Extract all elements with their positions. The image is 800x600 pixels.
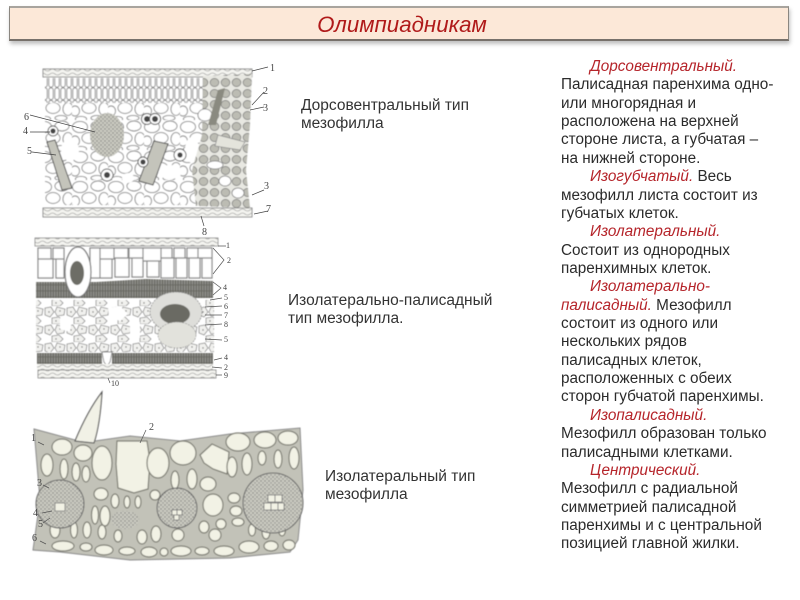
illustration: isolateral-palisade mesophyll cross-section	[35, 238, 218, 378]
text block: mesophyll types: Изолатеральный.	[590, 223, 720, 240]
text block: mesophyll types: или многорядная и	[561, 95, 696, 112]
spongy parenchyma	[36, 300, 214, 352]
top epidermis	[35, 238, 218, 246]
text block: mesophyll types	[561, 58, 773, 552]
callouts: isolateral-palisade labels: 6	[224, 302, 228, 311]
callouts: isolateral labels: 3	[37, 478, 42, 489]
title banner: Олимпиадникам	[317, 12, 487, 37]
caption: isolateral-palisade type	[288, 292, 492, 327]
text block: mesophyll types: состоит из одного или	[561, 315, 718, 332]
upper epidermis	[43, 69, 252, 77]
caption: dorsiventral type: мезофилла	[301, 115, 384, 132]
callouts: dorsiventral labels: 4	[23, 126, 28, 137]
text block: mesophyll types: Изопалисадный.	[590, 407, 707, 424]
epidermal and palisade cells	[41, 431, 299, 557]
callouts: isolateral labels: 4	[33, 508, 38, 519]
text block: mesophyll types: симметрией палисадной	[561, 499, 736, 516]
callouts: dorsiventral labels: 3	[263, 103, 268, 114]
callouts: isolateral-palisade labels: 1	[226, 241, 230, 250]
callouts: dorsiventral labels: 8	[202, 227, 207, 238]
bundle centres	[55, 495, 284, 520]
callouts: isolateral-palisade labels: 9	[224, 371, 228, 380]
callouts: isolateral-palisade labels: 8	[224, 320, 228, 329]
lower epidermis	[38, 370, 216, 378]
text block: mesophyll types: палисадных клеток,	[561, 352, 702, 369]
lower palisade band	[37, 353, 213, 364]
dark sclerified zone	[192, 74, 252, 208]
text block: mesophyll types: Изогубчатый. Весь	[590, 168, 732, 185]
vascular bundle	[90, 113, 124, 157]
text block: mesophyll types: Дорсовентральный.	[590, 58, 737, 75]
text block: mesophyll types: Состоит из однородных	[561, 242, 730, 259]
vascular bundle	[150, 292, 202, 332]
callouts: dorsiventral labels: 5	[27, 146, 32, 157]
callouts: isolateral-palisade labels	[108, 241, 231, 388]
callouts: isolateral-palisade labels: 5	[224, 335, 228, 344]
callouts: isolateral-palisade labels: 5	[224, 293, 228, 302]
upper palisade band	[36, 279, 213, 298]
caption: isolateral type: Изолатеральный тип	[325, 468, 475, 485]
caption: isolateral-palisade type: тип мезофилла.	[288, 310, 403, 327]
white air spaces	[60, 306, 140, 338]
caption: isolateral type: мезофилла	[325, 486, 408, 503]
caption: dorsiventral type: Дорсовентральный тип	[301, 97, 469, 114]
large air spaces	[61, 137, 199, 183]
caption: isolateral type	[325, 468, 475, 503]
text block: mesophyll types: губчатых клеток.	[561, 205, 679, 222]
stoma chamber	[102, 352, 112, 366]
text block: mesophyll types: Центрический.	[590, 462, 700, 479]
text block: mesophyll types: позицией главной жилки.	[561, 535, 740, 552]
callouts: isolateral-palisade labels: 2	[224, 363, 228, 372]
callouts: isolateral labels	[31, 422, 154, 544]
text block: mesophyll types: Палисадная паренхима одно-	[561, 76, 773, 93]
leaf body	[33, 428, 303, 560]
trichome	[75, 392, 102, 443]
idioblast cells	[48, 114, 186, 181]
spongy parenchyma	[45, 103, 207, 205]
text block: mesophyll types: паренхимы и с центральной	[561, 517, 762, 534]
title banner	[9, 6, 789, 41]
vein bundle in dark zone	[208, 88, 225, 125]
text block: mesophyll types: расположена на верхней	[561, 113, 739, 130]
stone cell centre	[139, 141, 168, 185]
callouts: isolateral-palisade labels: 7	[224, 311, 228, 320]
callouts: dorsiventral labels: 3	[264, 181, 269, 192]
text block: mesophyll types: сторон губчатой паренхимы.	[561, 388, 764, 405]
callouts: isolateral labels: 5	[38, 519, 43, 530]
idioblast with druse	[65, 247, 91, 297]
palisade layer	[45, 78, 203, 103]
text block: mesophyll types: паренхимных клеток.	[561, 260, 711, 277]
text block: mesophyll types: расположенных с обеих	[561, 370, 732, 387]
caption: isolateral-palisade type: Изолатерально-палисадный	[288, 292, 492, 309]
callouts: isolateral-palisade labels: 10	[111, 379, 119, 388]
text block: mesophyll types: мезофилл листа состоит из	[561, 187, 758, 204]
callouts: isolateral-palisade labels: 2	[227, 256, 231, 265]
text block: mesophyll types: нескольких рядов	[561, 333, 687, 350]
text block: mesophyll types: стороне листа, а губчатая –	[561, 131, 758, 148]
large water cells	[38, 248, 212, 278]
text block: mesophyll types: Мезофилл образован только	[561, 425, 767, 442]
callouts: dorsiventral labels: 1	[270, 63, 275, 74]
callouts: dorsiventral labels: 2	[263, 86, 268, 97]
stone cell left	[47, 140, 72, 190]
illustration: isolateral mesophyll cross-section	[33, 392, 303, 560]
callouts: isolateral labels: 1	[31, 433, 36, 444]
vascular bundles	[36, 473, 303, 533]
callouts: isolateral labels: 2	[149, 422, 154, 433]
caption: dorsiventral type	[301, 97, 469, 132]
callouts: isolateral-palisade labels: 4	[224, 353, 228, 362]
lower cells	[37, 364, 213, 370]
callouts: isolateral-palisade labels: 4	[223, 283, 227, 292]
text block: mesophyll types: Изолатерально-	[590, 278, 710, 295]
callouts: isolateral labels: 6	[32, 533, 37, 544]
lower epidermis	[43, 208, 252, 217]
callouts: dorsiventral labels: 7	[266, 204, 271, 215]
text block: mesophyll types: Мезофилл с радиальной	[561, 480, 738, 497]
text block: mesophyll types: палисадный. Мезофилл	[561, 297, 732, 314]
text block: mesophyll types: палисадными клетками.	[561, 444, 733, 461]
illustration: dorsiventral mesophyll cross-section	[43, 69, 252, 217]
text block: mesophyll types: на нижней стороне.	[561, 150, 700, 167]
callouts: dorsiventral labels: 6	[24, 112, 29, 123]
callouts: dorsiventral labels	[23, 63, 275, 238]
